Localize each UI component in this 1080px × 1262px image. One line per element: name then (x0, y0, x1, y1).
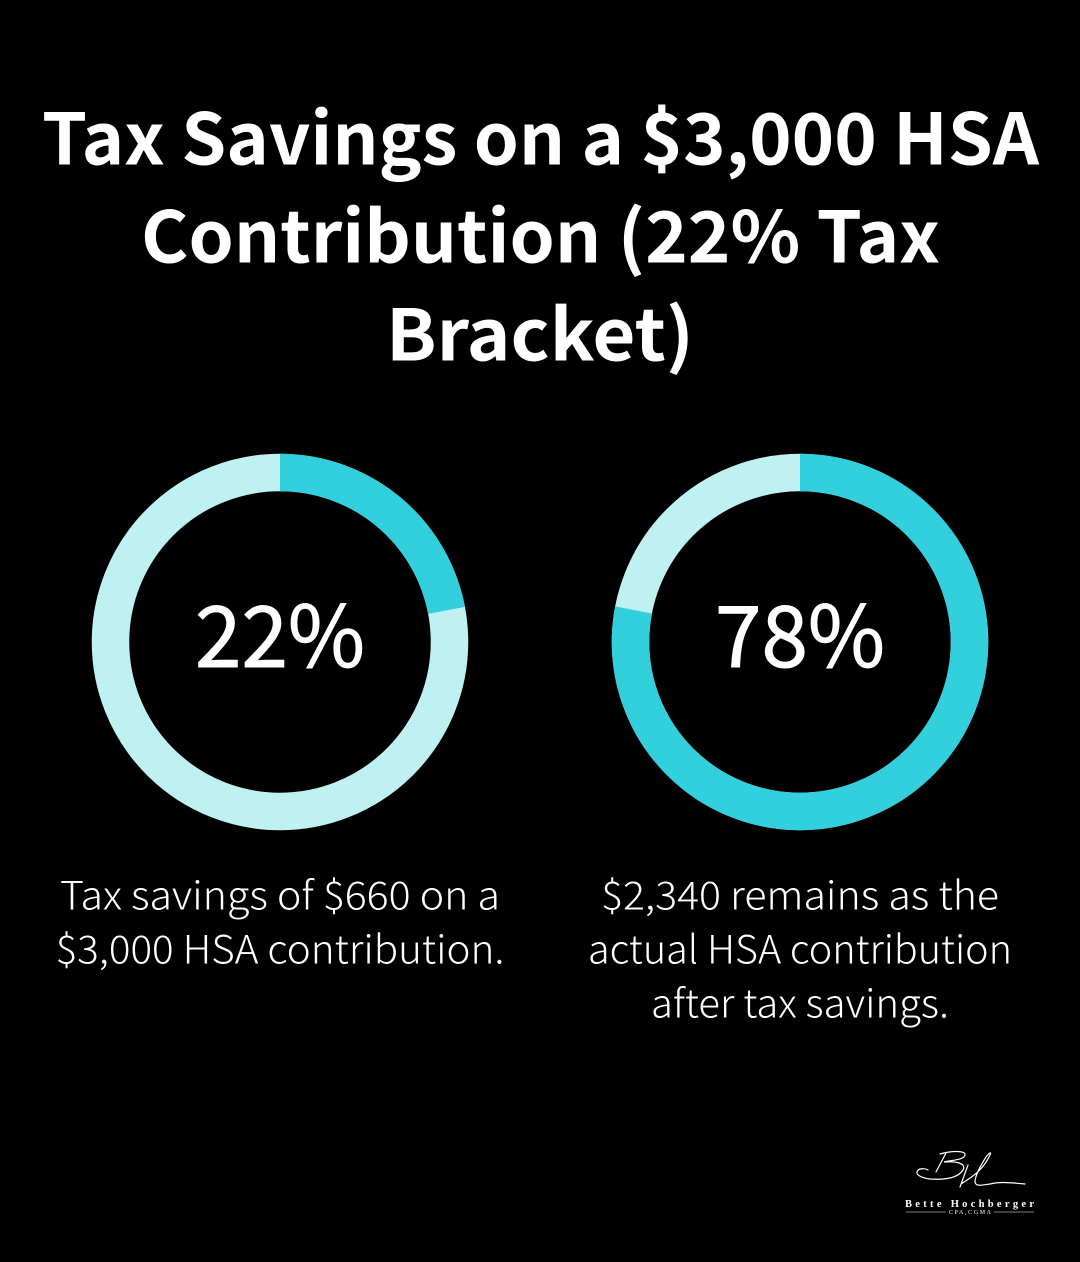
panel: 22% tax savings (56, 472, 504, 976)
company name: Bette Hochberger (905, 1199, 1034, 1210)
description: remaining contribution: $2,340 remains as the (601, 866, 999, 922)
credential line: CPA,CGMA (949, 1210, 992, 1216)
donut chart: 22% (110, 472, 450, 812)
title: Tax Savings on a $3,000 HSA (42, 84, 1039, 186)
percentage: 78%: 78% (715, 569, 885, 692)
percentage: 22%: 22% (195, 569, 365, 692)
description: remaining contribution: after tax savings. (651, 974, 949, 1030)
panel: 78% remaining contribution (588, 472, 1012, 1030)
donut chart: 78% (630, 472, 970, 812)
icon: BH signature (917, 1152, 1025, 1187)
title: Bracket) (386, 280, 694, 382)
title (42, 84, 1039, 382)
description: tax savings: Tax savings of $660 on a (60, 866, 500, 922)
description: remaining contribution: actual HSA contribution (588, 920, 1012, 976)
description: remaining contribution (588, 866, 1012, 1030)
description: tax savings: $3,000 HSA contribution. (56, 920, 504, 976)
description: tax savings (56, 866, 504, 976)
title: Contribution (22% Tax (141, 182, 940, 284)
logo: Bette Hochberger (905, 1152, 1034, 1216)
